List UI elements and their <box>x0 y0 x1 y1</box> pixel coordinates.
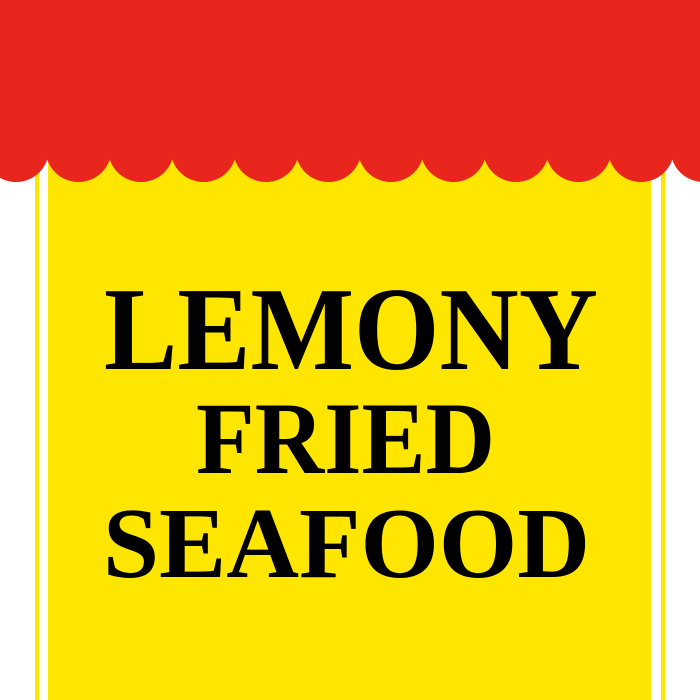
title text: FRIED <box>196 382 495 496</box>
title text <box>103 263 598 599</box>
thin yellow posts <box>35 150 665 700</box>
title text: SEAFOOD <box>103 487 590 599</box>
yellow sign panel <box>48 150 651 700</box>
red scalloped awning <box>0 0 700 182</box>
title text: LEMONY <box>104 263 598 395</box>
